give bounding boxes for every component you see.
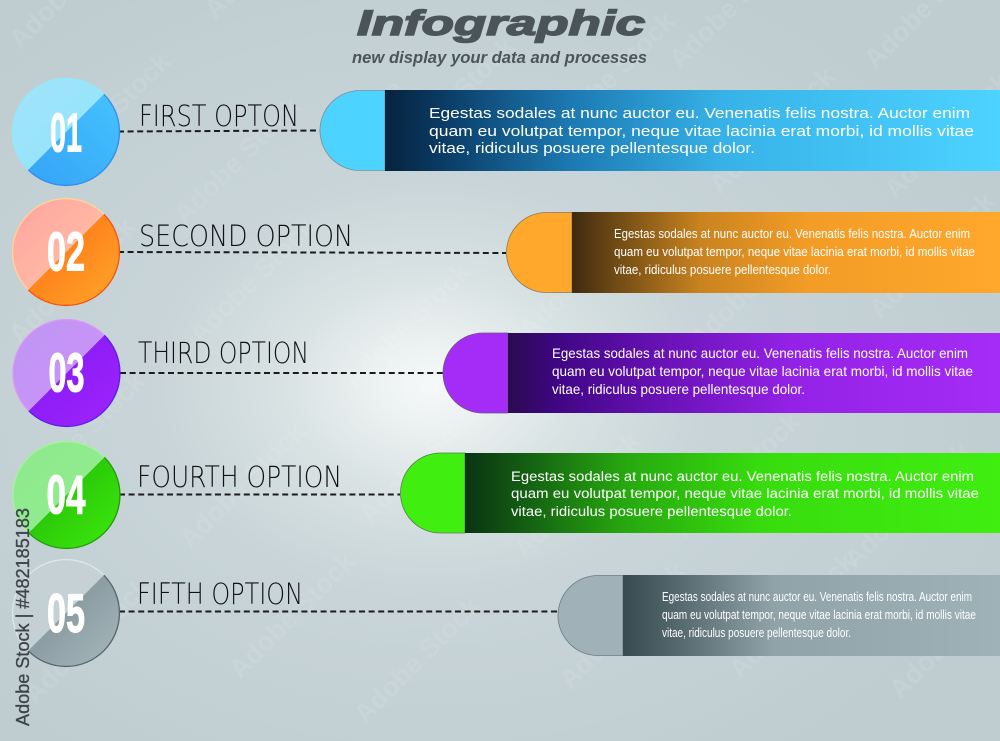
text: Adobe Stock — [683, 216, 822, 354]
text: Adobe Stock — [338, 256, 477, 394]
option bar 1: quam eu volutpat tempor, neque vitae lacinia erat morbi, id mollis vitae — [429, 123, 974, 140]
number badge 02 — [13, 199, 119, 305]
text: Adobe Stock — [168, 91, 307, 229]
connector line 2 — [118, 252, 506, 253]
number badge 02: 02 — [47, 220, 85, 282]
text: Adobe Stock — [183, 211, 322, 349]
stock id caption: Adobe Stock | #482185183 — [12, 508, 33, 726]
text: Adobe — [328, 74, 409, 154]
option label 3: THIRD OPTION — [138, 336, 309, 370]
number badge 04 — [13, 442, 120, 548]
number badge 05 — [13, 560, 119, 666]
text: Adobe Stock — [13, 366, 152, 504]
option label 5: FIFTH OPTION — [137, 577, 303, 611]
connector line 5 — [119, 610, 558, 612]
connector line 1 — [118, 130, 320, 132]
option bar 4: vitae, ridiculus posuere pellentesque dolor. — [511, 504, 792, 520]
option bar 3 — [443, 333, 1000, 413]
number badge 04: 04 — [46, 464, 86, 526]
subtitle: new display your data and processes — [352, 48, 647, 67]
connector line 4 — [119, 494, 400, 496]
option bar 3: quam eu volutpat tempor, neque vitae lacinia erat morbi, id mollis vitae — [552, 363, 973, 379]
text: Adobe Stock — [353, 391, 492, 529]
text: Adobe Stock — [553, 556, 692, 694]
text: Adobe Stock — [173, 416, 312, 554]
text: Adobe Stock — [543, 6, 682, 144]
text: Adobe Stock — [863, 186, 1000, 324]
text: Adobe Stock — [703, 61, 842, 199]
row 2: second option — [13, 199, 1000, 305]
text: Adobe Stock — [38, 46, 177, 184]
row 3: third option — [13, 320, 1000, 426]
connector line 3 — [120, 372, 443, 374]
number badge 03 — [13, 320, 120, 426]
option label 4: FOURTH OPTION — [137, 460, 342, 494]
text: Adobe Stock — [508, 426, 647, 564]
option bar 5: vitae, ridiculus posuere pellentesque dolor. — [662, 625, 851, 640]
text: Adobe Stock — [383, 31, 522, 169]
row 1: first option — [13, 79, 1000, 185]
text: Adobe Stock — [668, 406, 807, 544]
number badge 05: 05 — [47, 582, 85, 644]
text: Adobe Stock — [3, 211, 142, 349]
option bar 5 — [558, 575, 1000, 656]
option label 2: SECOND OPTION — [139, 219, 353, 253]
option bar 2: vitae, ridiculus posuere pellentesque dolor. — [614, 262, 831, 277]
text: Adobe Stock — [513, 206, 652, 344]
row 5: fifth option — [13, 560, 1000, 666]
text: Adobe Stock — [723, 546, 862, 684]
text: Adobe Stock — [348, 591, 487, 729]
text: Adobe Stock — [223, 546, 362, 684]
option bar 4: quam eu volutpat tempor, neque vitae lacinia erat morbi, id mollis vitae — [511, 486, 979, 502]
number badge 01: 01 — [50, 102, 82, 164]
text: Adobe Stock — [18, 571, 157, 709]
number badge 03: 03 — [48, 342, 84, 404]
number badge 01 — [13, 79, 119, 185]
option bar 1: vitae, ridiculus posuere pellentesque dolor. — [429, 140, 755, 157]
option label 1: FIRST OPTON — [139, 99, 299, 133]
option bar 2 — [506, 212, 1000, 293]
text: Adobe Stock — [838, 436, 977, 574]
option bar 1 — [320, 90, 1000, 171]
option bar 4: Egestas sodales at nunc auctor eu. Venenatis felis nostra. Auctor enim — [511, 469, 974, 485]
option bar 1: Egestas sodales at nunc auctor eu. Venenatis felis nostra. Auctor enim — [429, 105, 970, 122]
title: Infographic — [357, 4, 645, 43]
option bar 3: vitae, ridiculus posuere pellentesque dolor. — [552, 381, 805, 397]
row 4: fourth option — [13, 442, 1000, 548]
option bar 3: Egestas sodales at nunc auctor eu. Venenatis felis nostra. Auctor enim — [552, 345, 968, 361]
option bar 4 — [400, 453, 1000, 533]
